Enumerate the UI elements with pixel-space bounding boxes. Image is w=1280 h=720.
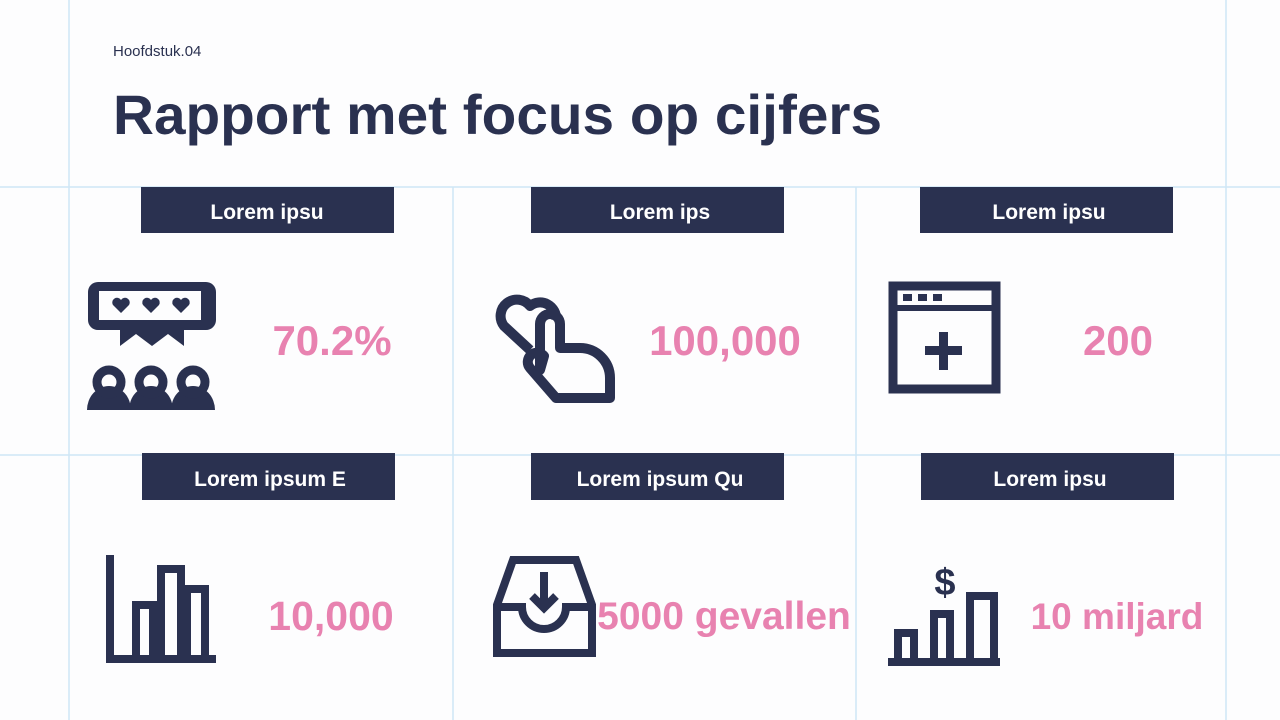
panel: 1: Lorem ipsu: [210, 201, 324, 224]
panel: 3: 200: [1083, 317, 1153, 364]
panel: 6: Lorem ipsu: [993, 468, 1107, 491]
icon: inbox download: [497, 560, 592, 653]
icon: money bars: [888, 596, 1000, 662]
panel: 5: [497, 453, 851, 653]
panel: 5: Lorem ipsum Qu: [577, 468, 743, 491]
icon: bar chart: [110, 555, 216, 659]
icon: heart hand: [501, 300, 610, 398]
panel: 6: 10 miljard: [1031, 596, 1203, 637]
panel: 3: Lorem ipsu: [992, 201, 1106, 224]
panel: 6: $: [934, 562, 956, 604]
panel: 1: [87, 187, 394, 410]
panel: 5: 5000 gevallen: [597, 595, 851, 638]
panel: 2: 100,000: [649, 317, 801, 364]
panel: 4: 10,000: [268, 593, 394, 639]
chapter label: Hoofdstuk.04: [113, 43, 201, 60]
icon: chat hearts people: [87, 282, 216, 410]
title: Rapport met focus op cijfers: [113, 83, 882, 146]
panel: 3: [893, 187, 1173, 389]
panel: 4: Lorem ipsum E: [194, 468, 346, 491]
panel: 2: Lorem ips: [610, 201, 710, 224]
panel: 2: [501, 187, 801, 398]
panel: 6: [888, 453, 1203, 662]
panel: 4: [110, 453, 395, 659]
icon: window plus: [893, 286, 996, 389]
stat: 70.2%: [272, 317, 392, 364]
